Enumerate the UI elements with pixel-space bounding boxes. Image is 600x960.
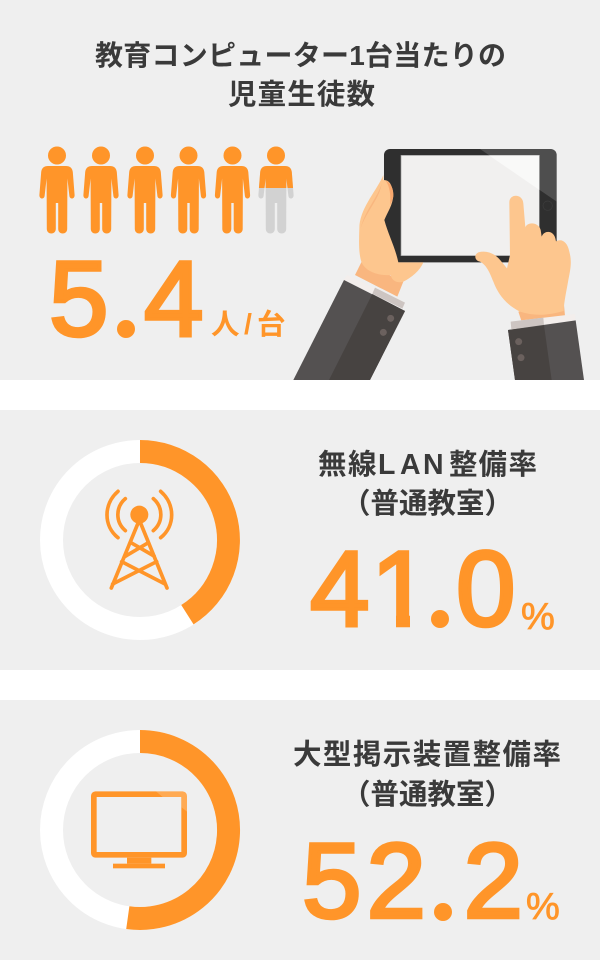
value: 41.0: 4 <box>310 528 370 648</box>
tablet <box>384 149 557 262</box>
left arm and hand <box>293 175 423 380</box>
value: 5.4: 5 <box>49 238 109 358</box>
title: 児童生徒数 <box>228 79 375 111</box>
value: 41.0: . <box>429 551 451 640</box>
unit: people per unit: / <box>244 309 252 341</box>
heading: （普通教室） <box>342 488 513 520</box>
value: 52.2: 2 <box>464 820 523 940</box>
value: 41.0: 1 <box>371 528 431 648</box>
heading <box>293 739 561 811</box>
panel: students per computer <box>0 0 600 380</box>
panel: wireless LAN rate <box>0 410 600 670</box>
unit: people per unit: 人 <box>211 309 240 341</box>
title: 教育コンピューター1台当たりの <box>95 40 506 71</box>
value: 41.0 <box>310 528 516 648</box>
person 3 <box>127 146 163 234</box>
right arm and hand <box>475 196 584 380</box>
unit: people per unit: 台 <box>257 309 286 341</box>
value: 5.4: 4 <box>144 238 204 358</box>
value: 41.0: 0 <box>456 528 516 648</box>
icon: radio tower <box>107 491 172 588</box>
title <box>95 40 506 111</box>
person 5 <box>215 146 250 234</box>
illustration: hands holding a tablet <box>293 149 584 380</box>
value: 52.2: . <box>432 843 454 932</box>
person 6 partial <box>258 146 294 234</box>
value: 5.4: . <box>115 261 137 350</box>
donut chart 41.0% <box>52 452 228 628</box>
panel: large display rate <box>0 700 600 960</box>
icon row: people <box>39 146 294 234</box>
heading: （普通教室） <box>342 779 513 811</box>
icon: monitor <box>94 791 187 868</box>
value: 52.2: 2 <box>366 820 426 940</box>
heading: 無線LAN整備率 <box>318 449 537 481</box>
donut chart 52.2% <box>52 742 229 918</box>
unit: percent: % <box>521 596 555 638</box>
heading: 大型掲示装置整備率 <box>293 739 561 771</box>
person 1 <box>39 146 75 234</box>
person 4 <box>171 146 206 234</box>
unit: percent: % <box>526 886 560 928</box>
person 2 <box>83 146 119 234</box>
heading <box>318 449 537 520</box>
value: 52.2: 5 <box>302 820 362 940</box>
value: 52.2 <box>302 820 523 940</box>
value: 5.4 <box>49 238 204 358</box>
